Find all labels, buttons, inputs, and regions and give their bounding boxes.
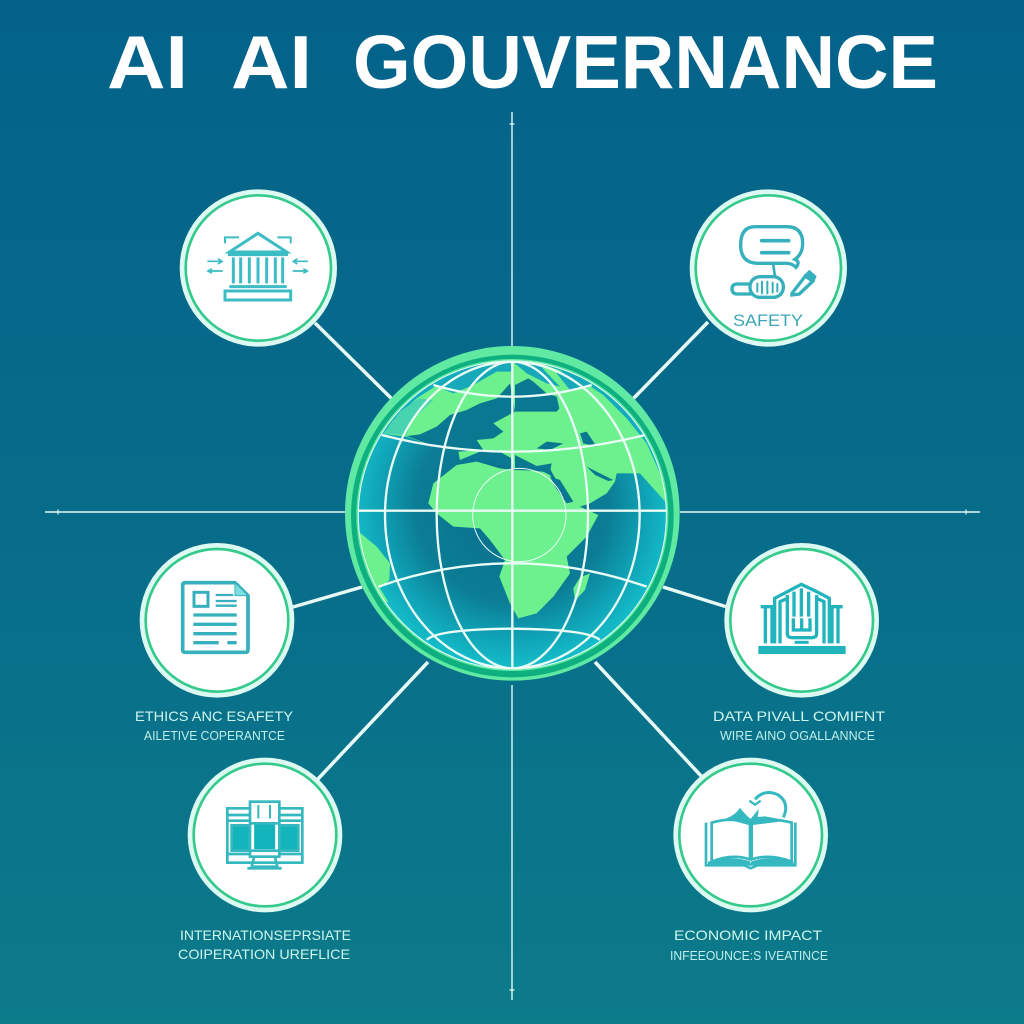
icon: classical building [207,233,308,300]
axis cross lines [45,112,980,1000]
globe [345,346,680,681]
icon label: safety: SAFETY [733,311,803,330]
node circle [673,758,828,912]
globe grid lines [358,361,667,669]
node circle [180,189,337,347]
node: international cooperation [188,758,342,912]
node circle [140,543,294,698]
node circle [188,758,342,912]
node: economic impact [673,758,828,912]
node circle [690,189,847,347]
node: ethics document [140,543,294,698]
northern shallows [433,363,592,393]
label: economic [670,927,828,963]
icon: temple building [760,584,844,652]
title: AI [231,20,312,104]
icon: speech bubble, device and pen [732,227,815,297]
land masses [357,363,668,618]
label: data [713,708,886,743]
label: economic: ECONOMIC IMPACT [674,927,822,943]
icon: monitors [227,802,302,868]
title [107,20,938,104]
label: international: INTERNATIONSEPRSIATE [180,927,351,943]
label: ethics [135,708,294,743]
icon: open book with arrow [706,792,795,868]
node: safety [690,189,847,347]
label: data: DATA PIVALL COMIFNT [713,708,886,724]
label: ethics: AILETIVE COPERANTCE [144,729,285,743]
label: international: COIPERATION UREFLICE [178,946,350,962]
label: economic: INFEEOUNCE:S IVEATINCE [670,949,828,963]
connector spokes [293,322,727,780]
title: GOUVERNANCE [353,20,938,104]
ocean disc [358,361,666,669]
label: data: WIRE AINO OGALLANNCE [720,729,875,743]
globe outer ring [345,346,680,681]
node circle [724,543,879,698]
node: institutions [180,189,337,347]
northwest gradient coast [383,398,433,435]
node: data building [724,543,879,698]
label: international [178,927,351,962]
title: AI [107,20,188,104]
seas [407,378,613,503]
land and seas [357,363,668,618]
icon: document [183,583,248,652]
label: ethics: ETHICS ANC ESAFETY [135,708,294,724]
